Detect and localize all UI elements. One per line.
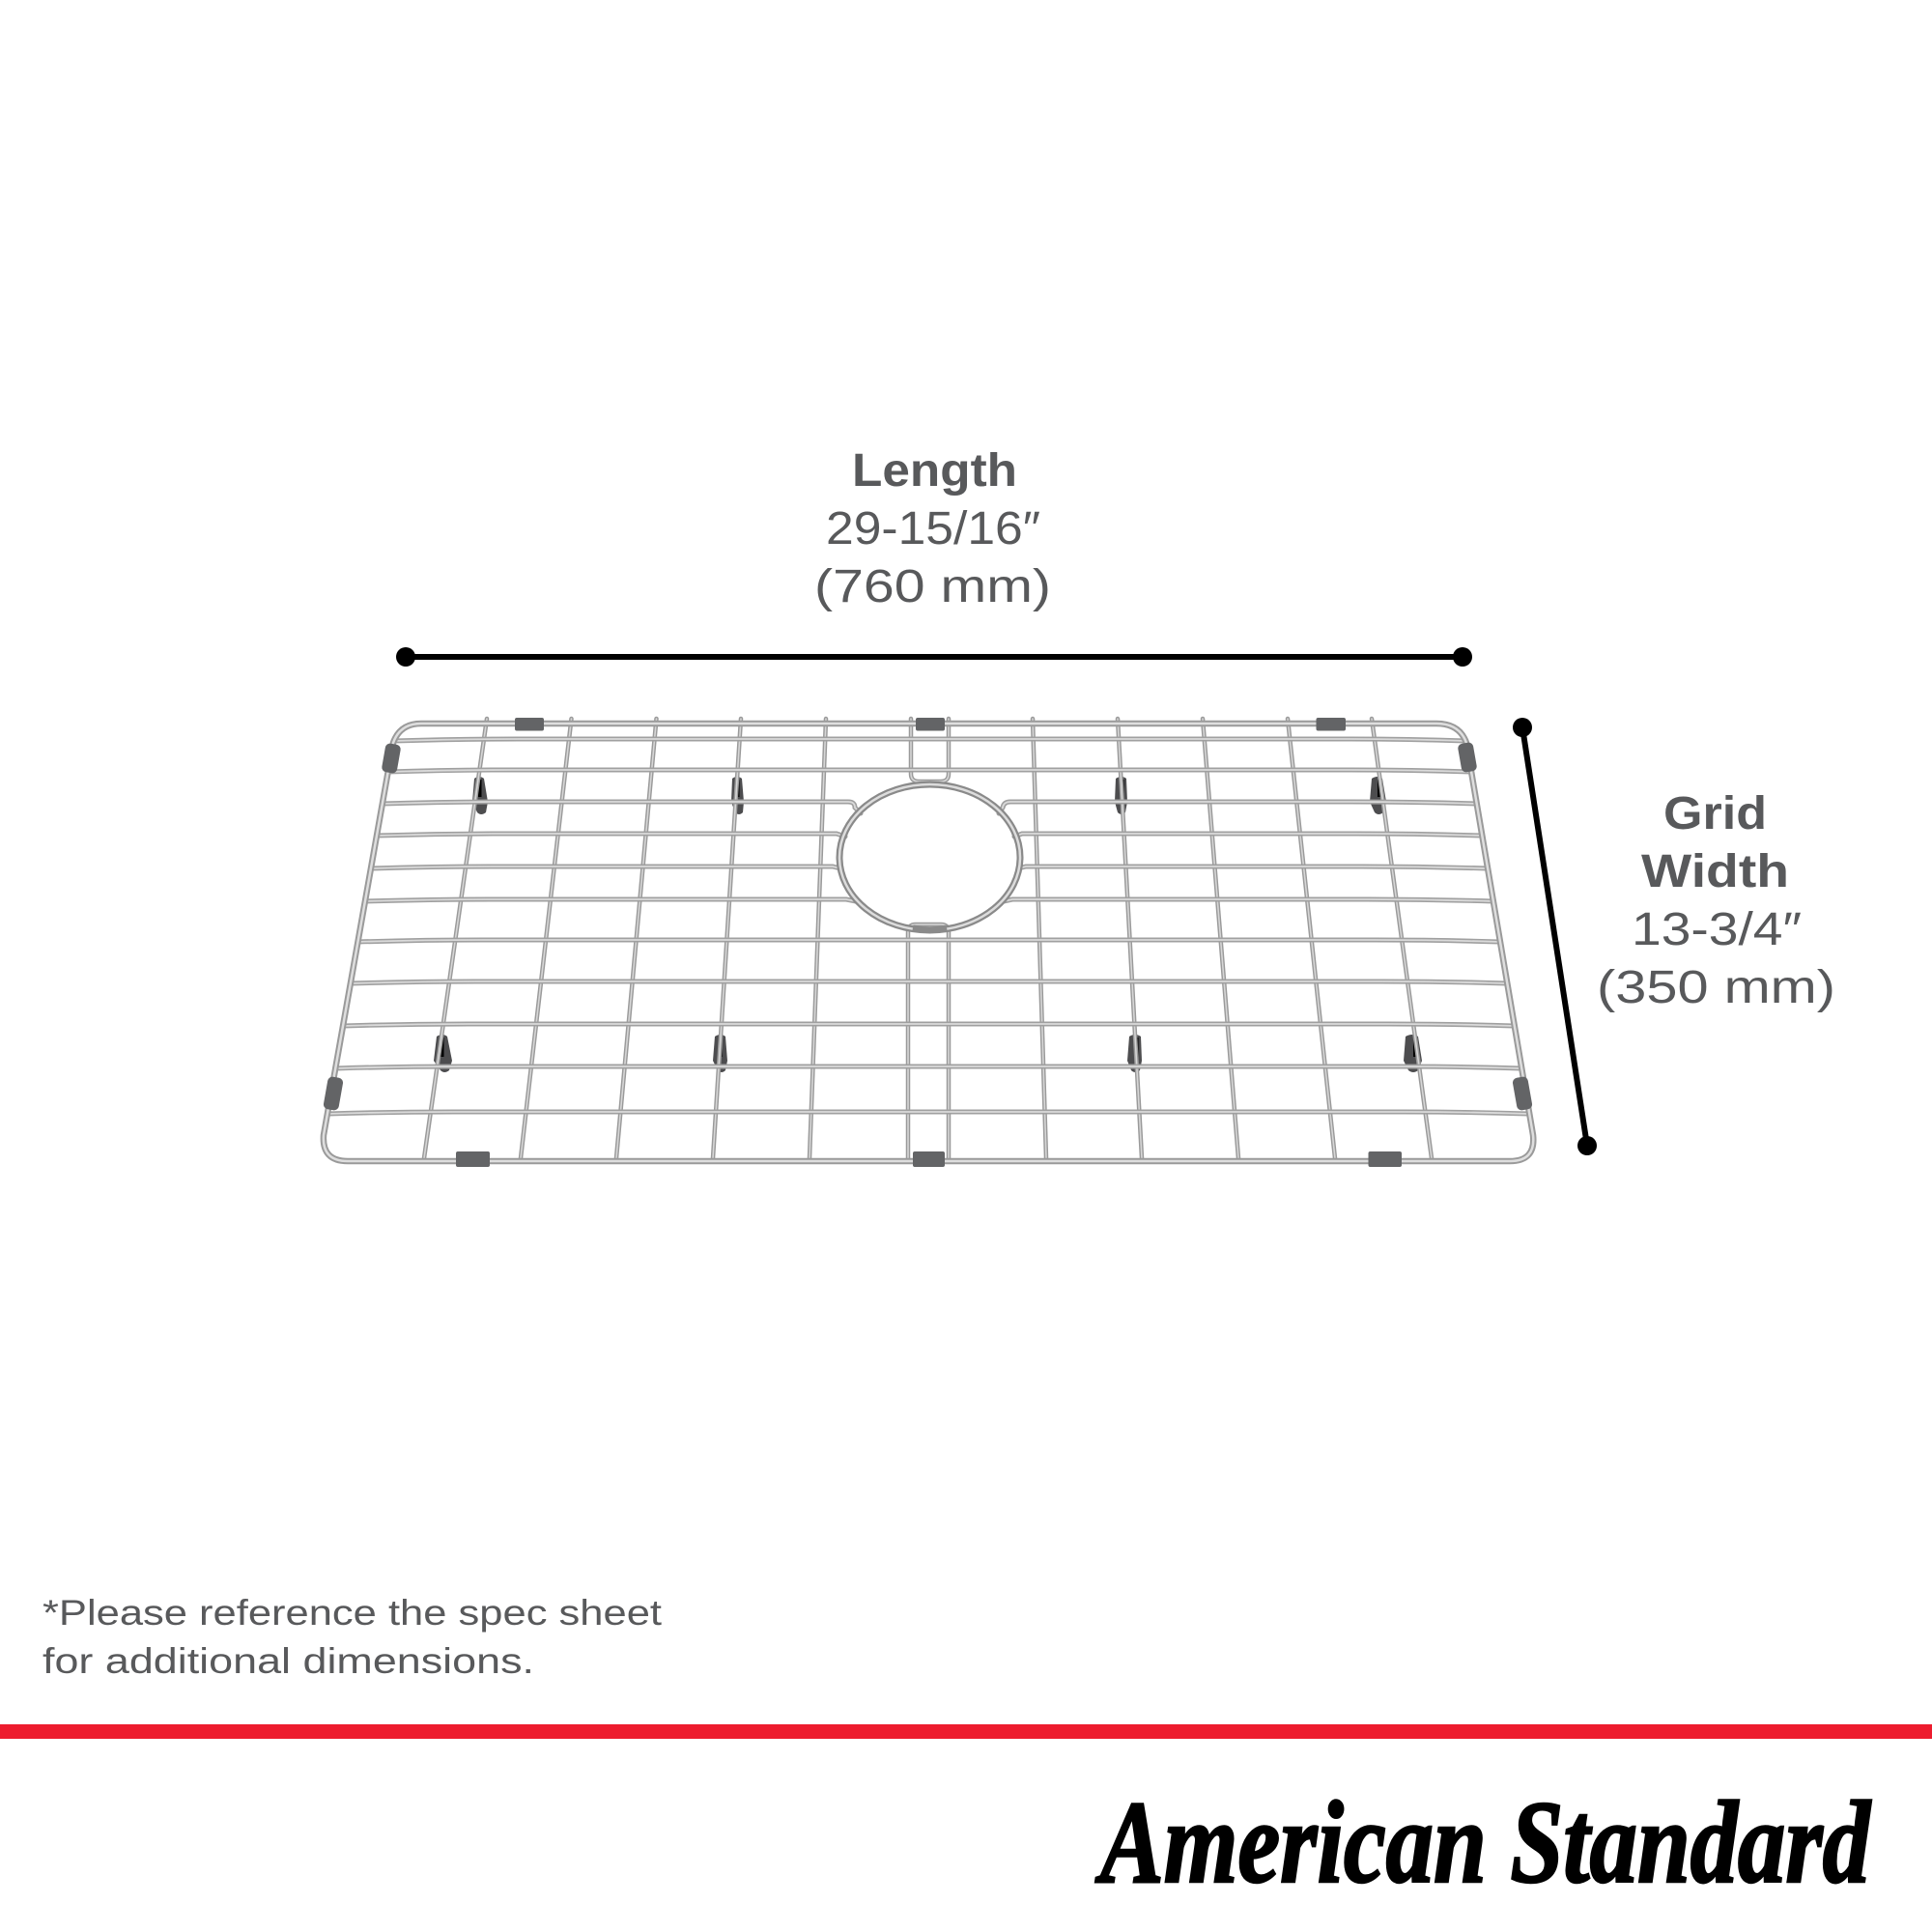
value: width in inches: 13-3/4″ xyxy=(1632,904,1802,955)
vertical wires xyxy=(424,719,1432,1158)
black retaining feet xyxy=(434,777,1422,1072)
red divider bar xyxy=(0,1724,1932,1739)
value: length in inches: 29-15/16″ xyxy=(826,503,1040,554)
label: Grid: Grid xyxy=(1663,788,1767,839)
footnote line 1: *Please reference the spec sheet xyxy=(43,1593,663,1633)
value: length in millimetres: (760 mm) xyxy=(814,561,1051,612)
footnote line 2: for additional dimensions. xyxy=(43,1641,534,1681)
arrow: length dimension line xyxy=(396,647,1472,667)
footnote xyxy=(43,1593,663,1681)
arrow: grid width dimension line xyxy=(1513,718,1597,1155)
illustration: stainless steel sink grid xyxy=(323,718,1533,1167)
horizontal wires xyxy=(328,739,1529,1114)
rubber bumpers: side corners xyxy=(323,742,1533,1111)
label: Length: Length xyxy=(852,445,1017,497)
label: Width: Width xyxy=(1641,846,1789,897)
heading: grid width dimension xyxy=(1597,788,1835,1013)
value: width in millimetres: (350 mm) xyxy=(1597,962,1835,1013)
heading: length dimension xyxy=(814,445,1051,612)
rubber bumpers: top rail xyxy=(515,718,1346,730)
rubber bumpers: bottom rail xyxy=(456,1151,1402,1167)
drain ring xyxy=(839,784,1020,930)
outer rail xyxy=(324,724,1533,1161)
